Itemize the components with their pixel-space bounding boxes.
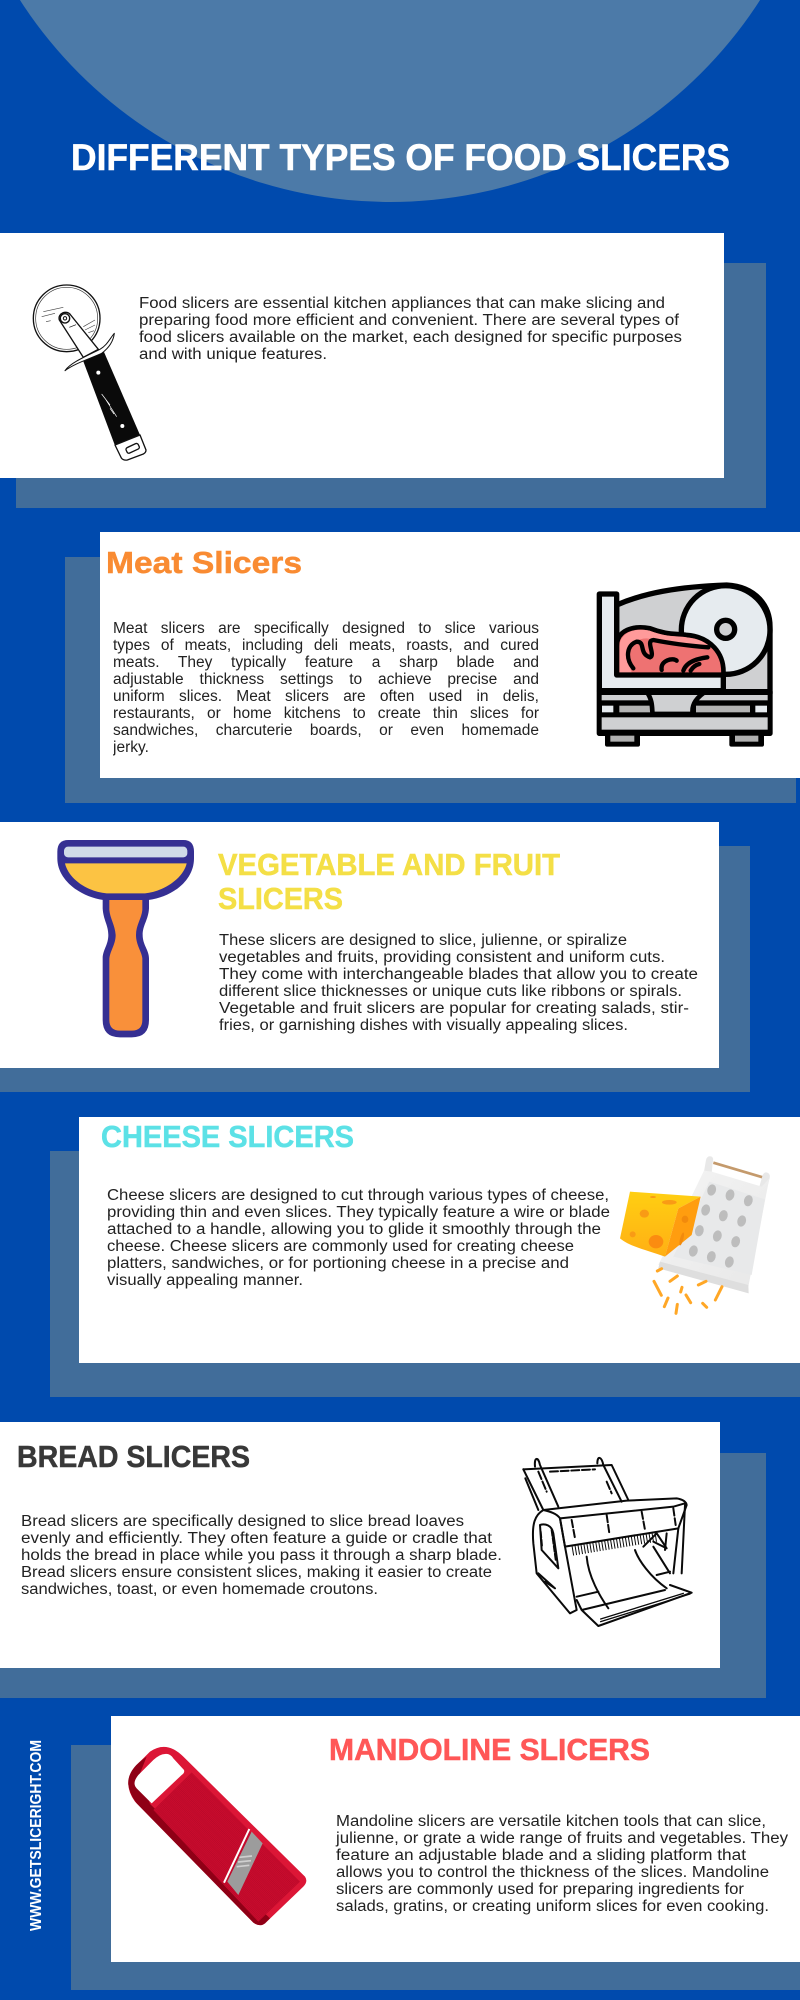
heading: mandoline slicers: MANDOLINE SLICERS [329,1732,650,1767]
text block: meat slicers: restaurants, or home kitchens to create thin slices for [113,705,539,722]
text block: cheese slicers: attached to a handle, allowing you to glide it smoothly through the [107,1221,601,1238]
heading: meat slicers: Meat Slicers [106,545,302,580]
text block: vegetable and fruit slicers: fries, or garnishing dishes with visually appealing slices. [219,1017,628,1034]
icon: meat slicer machine [599,585,770,747]
panel: mandoline slicers [71,1716,800,1990]
text block: cheese slicers: cheese. Cheese slicers are commonly used for creating cheese [107,1238,574,1255]
text block: mandoline slicers: Mandoline slicers are versatile kitchen tools that can slice, [336,1813,766,1830]
text block: meat slicers: types of meats, including deli meats, roasts, and cured [113,637,539,654]
text block: vegetable and fruit slicers: different slice thicknesses or unique cuts like ribbons or spirals. [219,983,682,1000]
text block: vegetable and fruit slicers: They come with interchangeable blades that allow you to create [219,966,698,983]
text block: meat slicers: meats. They typically feature a sharp blade and [113,654,539,671]
text block: mandoline slicers: slicers are commonly used for preparing ingredients for [336,1881,744,1898]
text block: bread slicers: sandwiches, toast, or even homemade croutons. [21,1581,378,1598]
text block: meat slicers: jerky. [113,739,149,756]
text block: introduction [139,295,682,363]
heading: vegetable and fruit slicers: VEGETABLE AND FRUIT [218,847,560,882]
text block: meat slicers: uniform slices. Meat slicers are often used in delis, [113,688,539,705]
panel: meat slicers [65,532,800,803]
panel: introduction [0,233,766,508]
text block: cheese slicers: platters, sandwiches, or for portioning cheese in a precise and [107,1255,569,1272]
text block: introduction: food slicers available on the market, each designed for specific purposes [139,329,682,346]
icon: cheese and grater [620,1156,770,1313]
text block: bread slicers: Bread slicers ensure consistent slices, making it easier to create [21,1564,492,1581]
icon: pizza cutter [33,285,146,460]
text block: mandoline slicers: salads, gratins, or creating uniform slices for even cooking. [336,1898,769,1915]
text block: meat slicers [113,620,539,760]
text block: mandoline slicers: feature an adjustable blade and a sliding platform that [336,1847,747,1864]
text block: cheese slicers: Cheese slicers are designed to cut through various types of cheese, [107,1187,609,1204]
heading: bread slicers: BREAD SLICERS [17,1439,250,1474]
icon: mandoline slicer [128,1747,306,1925]
text block: bread slicers: Bread slicers are specifically designed to slice bread loaves [21,1513,464,1530]
icon: bread slicer machine [523,1458,692,1626]
text block: mandoline slicers: allows you to control the thickness of the slices. Mandoline [336,1864,769,1881]
text block: vegetable and fruit slicers [219,932,698,1034]
text block: vegetable and fruit slicers: vegetables and fruits, providing consistent and uniform cuts. [219,949,665,966]
text block: cheese slicers: providing thin and even slices. They typically feature a wire or blade [107,1204,610,1221]
heading: vegetable and fruit slicers: SLICERS [218,881,343,916]
heading: cheese slicers: CHEESE SLICERS [101,1119,354,1154]
text block: mandoline slicers: julienne, or grate a wide range of fruits and vegetables. They [335,1830,788,1847]
text block: vegetable and fruit slicers: These slicers are designed to slice, julienne, or spiralize [219,932,627,949]
panel: cheese slicers [50,1117,800,1397]
text block: meat slicers: sandwiches, charcuterie boards, or even homemade [113,722,539,739]
text block: bread slicers [21,1513,502,1598]
text block: introduction: Food slicers are essential kitchen appliances that can make slicing and [139,295,665,312]
text block: introduction: preparing food more efficient and convenient. There are several types of [139,312,680,329]
text block: introduction: and with unique features. [139,346,327,363]
text block: mandoline slicers [335,1813,788,1915]
header circle [20,0,760,202]
text block: bread slicers: holds the bread in place while you pass it through a sharp blade. [21,1547,502,1564]
icon: peeler [57,840,194,1037]
text block: meat slicers: Meat slicers are specifically designed to slice various [113,620,539,637]
panel: bread slicers [0,1422,766,1698]
text block: vegetable and fruit slicers: Vegetable and fruit slicers are popular for creating salads, stir- [219,1000,689,1017]
heading: vegetable and fruit slicers [218,847,560,916]
text block: cheese slicers: visually appealing manner. [107,1272,303,1289]
panel: vegetable and fruit slicers [0,822,750,1092]
text block: cheese slicers [107,1187,610,1289]
text block: meat slicers: adjustable thickness settings to achieve precise and [113,671,539,688]
text block: bread slicers: evenly and efficiently. They often feature a guide or cradle that [21,1530,493,1547]
